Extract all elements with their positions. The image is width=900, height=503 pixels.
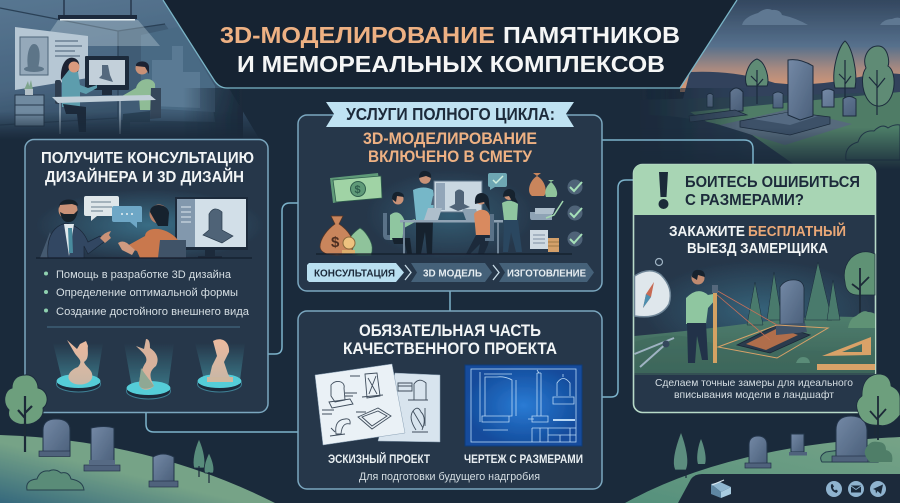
panel: consultation bbox=[25, 140, 268, 412]
services heading: ВКЛЮЧЕНО В СМЕТУ bbox=[368, 148, 533, 166]
project labels: ЧЕРТЕЖ С РАЗМЕРАМИ bbox=[464, 454, 583, 466]
bottom-left hill with gravestones bbox=[0, 419, 275, 503]
free visit heading bbox=[669, 222, 846, 257]
consultation heading: ДИЗАЙНЕРА И 3D ДИЗАЙН bbox=[45, 167, 244, 186]
desk bbox=[52, 95, 156, 103]
consultation bullet list: Определение оптимальной формы bbox=[56, 287, 238, 299]
client bbox=[118, 204, 186, 258]
project heading bbox=[343, 322, 557, 358]
consultation bullet list: Создание достойного внешнего вида bbox=[56, 306, 249, 318]
set square bbox=[822, 337, 871, 356]
project labels bbox=[328, 453, 583, 466]
dividers bbox=[634, 338, 674, 367]
budget icons with checks bbox=[529, 173, 582, 252]
panel: mandatory project part bbox=[298, 311, 602, 489]
monument bbox=[737, 325, 810, 353]
title lines bbox=[220, 22, 680, 77]
seated woman bbox=[466, 193, 494, 254]
free visit heading: БЕСПЛАТНЫЙ bbox=[748, 222, 846, 240]
woman bbox=[62, 70, 97, 107]
title lines: И МЕМОРЕАЛЬНЫХ КОМПЛЕКСОВ bbox=[237, 51, 665, 77]
ribbon banner: УСЛУГИ ПОЛНОГО ЦИКЛА: bbox=[346, 104, 555, 124]
illustration: office consultation scene bbox=[0, 0, 260, 140]
project heading: ОБЯЗАТЕЛЬНАЯ ЧАСТЬ bbox=[359, 322, 541, 340]
connector lines between panels bbox=[146, 140, 753, 432]
compass bbox=[634, 258, 670, 317]
standing woman bbox=[502, 189, 522, 252]
bottom-right hill with gravestones bbox=[625, 400, 900, 503]
consultation heading: ПОЛУЧИТЕ КОНСУЛЬТАЦИЮ bbox=[41, 150, 254, 167]
title lines: 3D-МОДЕЛИРОВАНИЕ bbox=[220, 22, 495, 48]
illustration: measuring a monument bbox=[634, 252, 878, 375]
free visit heading: ВЫЕЗД ЗАМЕРЩИКА bbox=[687, 241, 828, 257]
services heading bbox=[363, 130, 537, 166]
illustration: cemetery landscape at dusk bbox=[673, 0, 900, 166]
cash stack: $ bbox=[354, 184, 361, 196]
panel: measurer bbox=[634, 164, 878, 412]
seated man bbox=[383, 192, 415, 254]
speech bubbles bbox=[84, 196, 142, 228]
measurer caption: вписывания модели в ландшафт bbox=[674, 389, 834, 401]
process steps bbox=[307, 263, 594, 282]
illustration: designer and client bbox=[35, 189, 265, 261]
illustration: sketches bbox=[315, 364, 440, 445]
measurer caption bbox=[655, 377, 853, 401]
consultation heading bbox=[41, 150, 254, 186]
free visit heading: ЗАКАЖИТЕ bbox=[669, 224, 745, 240]
process steps: ИЗГОТОВЛЕНИЕ bbox=[507, 268, 586, 280]
project caption: Для подготовки будущего надгробия bbox=[359, 471, 540, 483]
trees bbox=[747, 262, 840, 325]
consultation bullet list: Помощь в разработке 3D дизайна bbox=[56, 269, 231, 281]
icon: telegram bbox=[870, 481, 886, 497]
process steps: 3D МОДЕЛЬ bbox=[423, 268, 482, 280]
man bbox=[122, 79, 156, 110]
left tree overlapping the consultation panel bbox=[5, 375, 47, 452]
icon: mail bbox=[848, 481, 864, 497]
illustration: 3D statues on pedestals bbox=[53, 339, 245, 399]
services heading: 3D-МОДЕЛИРОВАНИЕ bbox=[363, 130, 537, 148]
tree bbox=[746, 59, 768, 86]
money bags: $ bbox=[331, 234, 340, 251]
project heading: КАЧЕСТВЕННОГО ПРОЕКТА bbox=[343, 340, 557, 358]
panel: full-cycle services bbox=[298, 102, 602, 291]
tree overlapping measurer panel bbox=[857, 374, 900, 440]
warning header bbox=[634, 164, 876, 215]
cash stack bbox=[330, 173, 382, 203]
illustration: blueprint bbox=[465, 365, 582, 446]
money bags bbox=[320, 216, 372, 255]
icon: phone bbox=[826, 481, 842, 497]
warning header: БОИТЕСЬ ОШИБИТЬСЯ bbox=[685, 174, 860, 191]
title panel bbox=[163, 0, 737, 88]
standing man bbox=[413, 171, 447, 254]
man with ruler bbox=[686, 291, 717, 324]
consultation bullet list bbox=[44, 269, 249, 318]
laptops and table bbox=[400, 208, 503, 254]
measuring frame and laser bbox=[718, 325, 828, 358]
project labels: ЭСКИЗНЫЙ ПРОЕКТ bbox=[328, 453, 430, 466]
check bubble bbox=[488, 173, 507, 190]
illustration: team at a table with budget icons bbox=[316, 170, 582, 260]
monitor bbox=[434, 181, 482, 212]
warning header: С РАЗМЕРАМИ? bbox=[685, 192, 804, 209]
measurer caption: Сделаем точные замеры для идеального bbox=[655, 377, 853, 389]
icon: 3D box logo bbox=[711, 480, 731, 498]
title lines: ПАМЯТНИКОВ bbox=[503, 22, 680, 48]
monitor bbox=[175, 197, 248, 258]
process steps: КОНСУЛЬТАЦИЯ bbox=[314, 268, 395, 280]
